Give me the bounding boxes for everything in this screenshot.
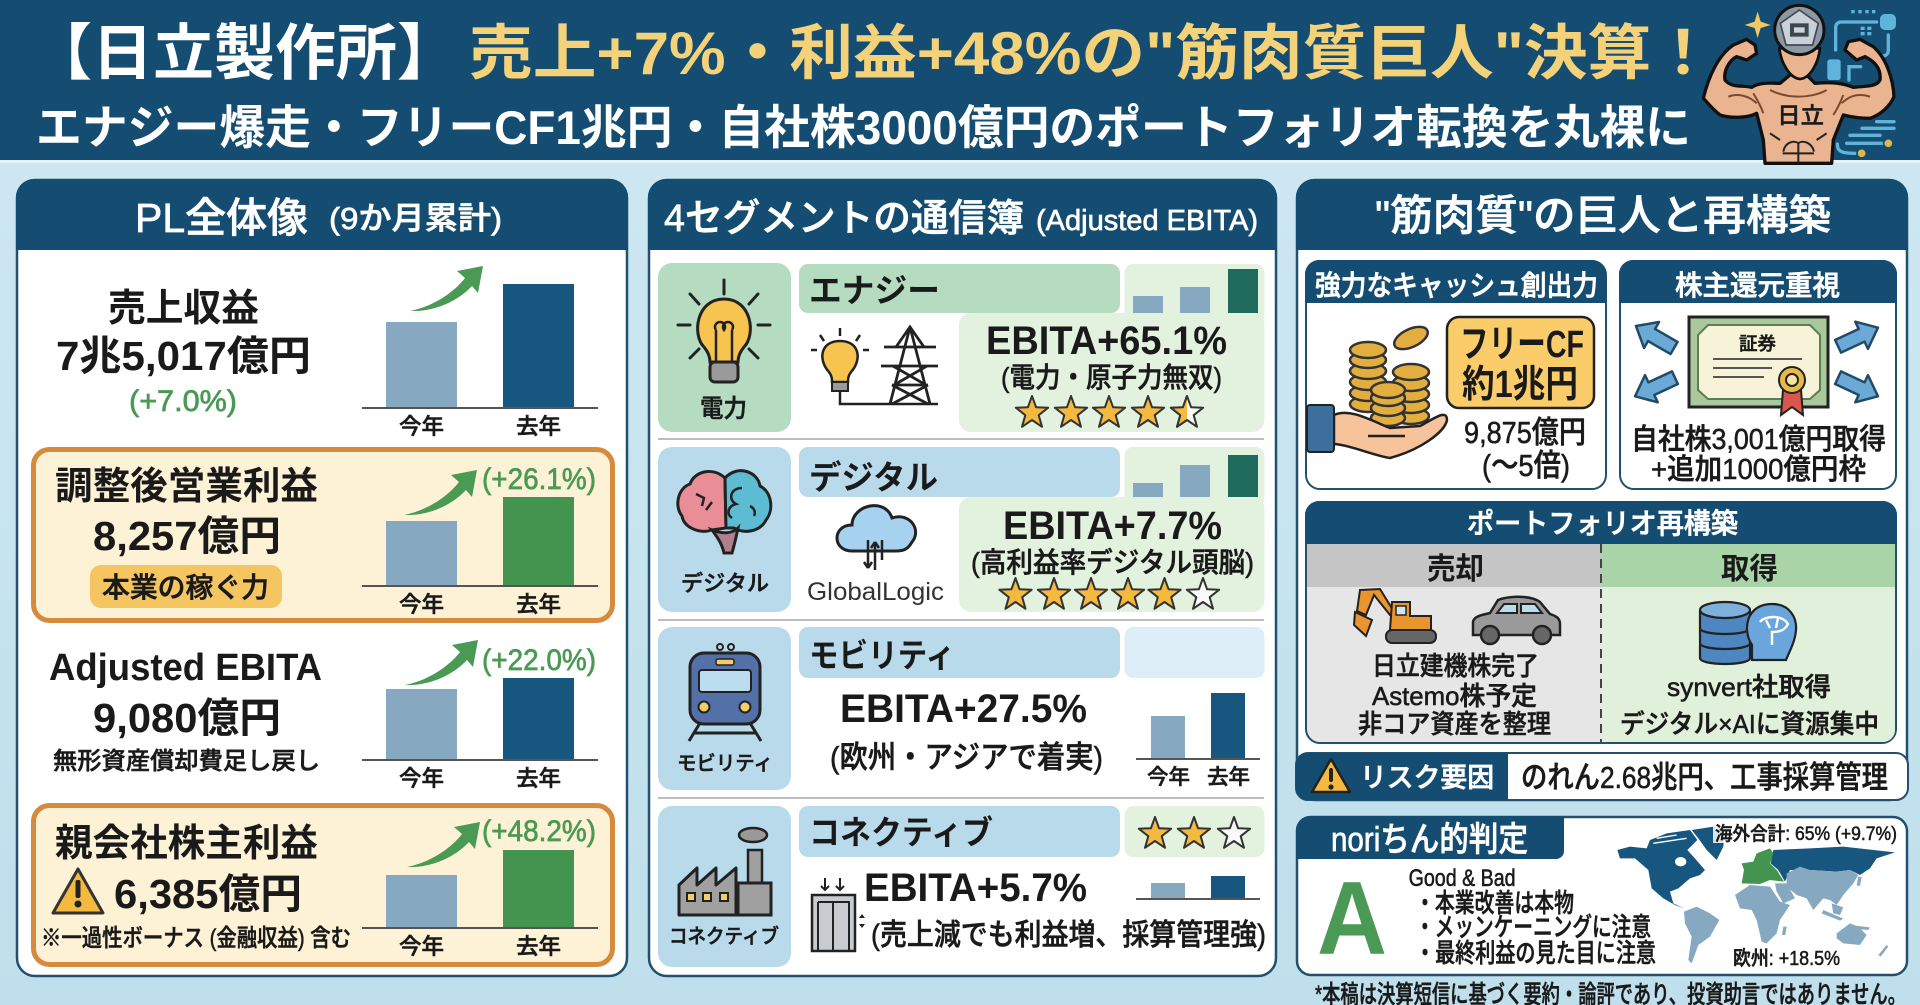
row: net income attributable to shareholders: 6,385億円 (114, 871, 302, 917)
icon: elevator (812, 878, 865, 951)
segment: energy: EBITA+65.1% (986, 319, 1227, 363)
panel: shareholder returns: +追加1000億円枠 (1651, 453, 1866, 486)
icon: stock certificate with arrows (1628, 313, 1884, 415)
icon: database and AI head (1700, 602, 1796, 664)
world map (1617, 827, 1895, 963)
segment: mobility: EBITA+27.5% (840, 687, 1087, 731)
icon: warning triangle (53, 869, 103, 913)
bar chart: adjusted operating profit: (+26.1%) (482, 463, 596, 496)
segment: energy: エナジー (809, 272, 940, 309)
heading: PL overview (135, 195, 502, 241)
grade A: A (1317, 861, 1387, 977)
icon: train (689, 644, 761, 741)
bar chart: revenue: 今年 (399, 414, 444, 439)
mini bars (1133, 455, 1258, 497)
row: revenue: 7兆5,017億円 (56, 333, 311, 379)
bar chart: net income: 去年 (516, 934, 561, 959)
segment: energy: (電力・原子力無双) (1001, 362, 1222, 393)
heading: restructuring: "筋肉質"の巨人と再構築 (1375, 192, 1831, 239)
panel: four segments report card (648, 179, 1277, 976)
title line 1: 【日立製作所】 (31, 19, 458, 87)
icon: cloud GlobalLogic (807, 506, 944, 606)
callout: free cash flow: フリーCF (1460, 324, 1584, 366)
panel: nori verdict: noriちん的判定 (1331, 821, 1528, 859)
callout: free cash flow (1447, 317, 1594, 408)
column: divest: Astemo株予定 (1372, 681, 1537, 711)
segment: energy (658, 263, 1264, 432)
segment: digital: デジタル (681, 571, 769, 596)
bar chart: adjusted EBITA: 去年 (516, 766, 561, 791)
icon: excavator (1354, 589, 1436, 643)
bar chart: revenue: 去年 (516, 414, 561, 439)
column: divest: 日立建機株完了 (1372, 651, 1539, 681)
column: divest (1354, 553, 1560, 739)
segment: mobility: モビリティ (809, 637, 955, 674)
segment: mobility: (欧州・アジアで着実) (830, 740, 1103, 775)
panel: nori verdict (1296, 816, 1907, 977)
panel: portfolio restructuring (1305, 501, 1897, 743)
panel: cash generation: (～5倍) (1482, 448, 1570, 483)
icon: stock certificate with arrows: 証券 (1739, 334, 1776, 354)
column: acquire: デジタル×AIに資源集中 (1620, 709, 1879, 739)
bar chart: net income (362, 815, 598, 959)
row: net income attributable to shareholders: ※一過性ボーナス (金融収益) 含む (41, 925, 351, 952)
bar chart: revenue (362, 266, 598, 439)
callout: core earning power (90, 565, 282, 608)
bar chart: adjusted EBITA (362, 640, 598, 791)
bar chart: adjusted operating profit (362, 463, 598, 617)
bar chart: adjusted EBITA: 今年 (399, 766, 444, 791)
panel: shareholder returns (1619, 260, 1897, 489)
icon: warning triangle (1312, 759, 1350, 792)
panel: cash generation: 強力なキャッシュ創出力 (1315, 270, 1598, 301)
column: divest: 売却 (1427, 553, 1484, 586)
panel: portfolio restructuring: ポートフォリオ再構築 (1467, 508, 1738, 539)
heading: segments: (Adjusted EBITA) (1036, 205, 1258, 237)
panel: shareholder returns: 株主還元重視 (1675, 270, 1840, 301)
segment: digital: デジタル (809, 459, 938, 496)
header banner (0, 0, 1920, 163)
panel: PL overview (16, 179, 628, 976)
segment: connective: EBITA+5.7% (864, 866, 1087, 910)
risk factors bar: リスク要因 (1360, 763, 1494, 793)
map label: overseas total: 海外合計: 65% (+9.7%) (1715, 823, 1897, 845)
segment: mobility (658, 627, 1264, 790)
row: revenue: 売上収益 (108, 288, 259, 330)
column: acquire: 取得 (1721, 553, 1778, 586)
panel: muscular giant and restructuring (1296, 179, 1908, 800)
risk factors bar (1296, 753, 1908, 800)
row: revenue (56, 266, 598, 439)
icon: light bulb (678, 280, 770, 382)
mini bars (1133, 269, 1258, 313)
heading: PL overview: PL全体像 (135, 195, 308, 241)
row: adjusted EBITA: 無形資産償却費足し戻し (53, 748, 320, 775)
bar chart: connective (1136, 876, 1260, 900)
row: adjusted EBITA (49, 640, 598, 791)
title line 2: エナジー爆走・フリーCF1兆円・自社株3000億円のポートフォリオ転換を丸裸に (36, 101, 1691, 154)
good and bad list: Good & Bad (1409, 865, 1516, 892)
callout: free cash flow: 約1兆円 (1462, 364, 1578, 406)
icon: muscular giant mascot (1703, 5, 1896, 163)
heading: segments (664, 198, 1258, 240)
row: adjusted EBITA: 9,080億円 (93, 695, 281, 741)
map label: Europe: 欧州: +18.5% (1733, 947, 1840, 970)
segment: digital: (高利益率デジタル頭脳) (971, 547, 1254, 578)
column: acquire: synvert社取得 (1667, 672, 1831, 702)
bar chart: adjusted EBITA: (+22.0%) (482, 644, 596, 677)
bar chart: net income: (+48.2%) (482, 815, 596, 848)
bar chart: net income: 今年 (399, 934, 444, 959)
row: net income attributable to shareholders: 親会社株主利益 (55, 823, 318, 865)
title line 1: 売上+7%・利益+48%の"筋肉質巨人"決算！ (469, 20, 1715, 87)
row: revenue: (+7.0%) (129, 385, 237, 418)
title line 1 (31, 19, 1715, 87)
rating stars (1016, 396, 1203, 427)
bar chart: mobility: 去年 (1207, 766, 1250, 789)
icon: hand with coins (1307, 322, 1447, 458)
row: adjusted operating profit: 8,257億円 (93, 513, 281, 559)
heading: PL overview: (9か月累計) (329, 201, 502, 236)
icon: brain (678, 471, 771, 553)
icon: muscular giant mascot: 日立 (1777, 102, 1824, 128)
segment: connective: コネクティブ (669, 924, 779, 948)
segment: energy: 電力 (700, 395, 747, 423)
segment: digital: EBITA+7.7% (1003, 504, 1222, 548)
good and bad list: ・最終利益の見た目に注意 (1415, 938, 1656, 968)
good and bad list (1409, 865, 1656, 968)
segment: connective: (売上減でも利益増、採算管理強) (871, 919, 1266, 952)
row: adjusted EBITA: Adjusted EBITA (49, 647, 322, 689)
column: divest: 非コア資産を整理 (1358, 709, 1551, 739)
panel: cash generation: 9,875億円 (1464, 415, 1586, 450)
segment: digital (658, 447, 1264, 612)
bar chart: mobility (1136, 693, 1260, 789)
panel: cash generation (1305, 260, 1606, 489)
icon: bulb and pylon (811, 327, 938, 404)
bar chart: mobility: 今年 (1147, 766, 1190, 789)
icon: cloud GlobalLogic: GlobalLogic (807, 578, 944, 606)
row: adjusted operating profit: 調整後営業利益 (55, 466, 318, 508)
bar chart: adjusted operating profit: 去年 (516, 592, 561, 617)
icon: car (1473, 597, 1560, 644)
bar chart: adjusted operating profit: 今年 (399, 592, 444, 617)
panel: shareholder returns: 自社株3,001億円取得 (1631, 423, 1886, 456)
column: acquire (1620, 553, 1879, 739)
good and bad list: ・メッンケーニングに注意 (1415, 912, 1651, 942)
segment: connective (658, 806, 1266, 967)
row: adjusted operating profit (34, 450, 612, 620)
row: net income attributable to shareholders (34, 806, 612, 964)
callout: core earning power: 本業の稼ぐ力 (102, 572, 269, 603)
heading: segments: 4セグメントの通信簿 (664, 198, 1024, 240)
rating stars (999, 578, 1219, 609)
segment: mobility: モビリティ (677, 752, 773, 775)
icon: factory (679, 828, 771, 915)
rating stars (1139, 817, 1250, 848)
good and bad list: ・本業改善は本物 (1415, 888, 1574, 918)
segment: connective: コネクティブ (809, 814, 993, 851)
